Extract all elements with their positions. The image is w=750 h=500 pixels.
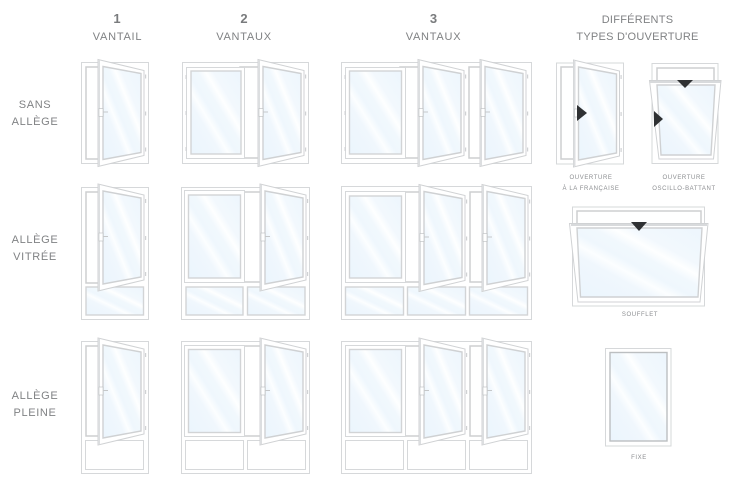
- heading: 2 vantaux: [216, 11, 272, 43]
- caption: oscillo-battant: OUVERTURE: [663, 175, 705, 181]
- caption: soufflet: SOUFFLET: [622, 312, 658, 318]
- row label: sans allège: ALLÈGE: [12, 115, 58, 128]
- type: fixe: [606, 348, 671, 461]
- icon: arrow right: [577, 105, 587, 121]
- heading: 2 vantaux: VANTAUX: [216, 31, 272, 43]
- type: ouverture oscillo-battant: [650, 64, 721, 192]
- window: 1 vantail sans allège: [82, 60, 148, 166]
- row label: allège vitrée: VITRÉE: [13, 250, 57, 263]
- type: soufflet: [570, 207, 708, 318]
- caption: oscillo-battant: OSCILLO-BATTANT: [652, 186, 716, 192]
- heading: 2 vantaux: 2: [240, 11, 248, 26]
- caption: française: [562, 175, 620, 192]
- window: 2 vantaux allège vitrée: [182, 184, 310, 320]
- heading: 1 vantail: 1: [113, 11, 121, 26]
- heading: 1 vantail: [93, 11, 142, 43]
- row label: sans allège: SANS: [19, 99, 51, 111]
- caption: fixe: FIXE: [631, 455, 647, 461]
- type: ouverture à la française: [556, 60, 624, 192]
- window: 3 vantaux allège pleine: [342, 338, 532, 474]
- heading: types d'ouverture: [576, 13, 699, 43]
- window: 2 vantaux allège pleine: [182, 338, 310, 474]
- caption: française: OUVERTURE: [570, 175, 612, 181]
- window: 2 vantaux sans allège: [182, 60, 308, 166]
- heading: types d'ouverture: DIFFÉRENTS: [602, 13, 673, 26]
- window: 3 vantaux sans allège: [342, 60, 532, 166]
- icon: arrow right: [654, 111, 663, 127]
- row label: allège vitrée: [12, 233, 58, 263]
- row label: allège pleine: [12, 389, 58, 419]
- window: 1 vantail allège pleine: [82, 338, 148, 474]
- icon: arrow down: [631, 222, 647, 231]
- row label: allège vitrée: ALLÈGE: [12, 233, 58, 246]
- heading: 3 vantaux: VANTAUX: [406, 31, 461, 43]
- caption: oscillo-battant: [652, 175, 716, 192]
- row label: allège pleine: PLEINE: [13, 407, 57, 419]
- caption: française: À LA FRANÇAISE: [562, 185, 620, 192]
- heading: 1 vantail: VANTAIL: [93, 31, 142, 43]
- icon: arrow down: [677, 80, 693, 88]
- row label: sans allège: [12, 99, 58, 128]
- heading: types d'ouverture: TYPES D'OUVERTURE: [576, 31, 699, 43]
- row label: allège pleine: ALLÈGE: [12, 389, 58, 402]
- window: 1 vantail allège vitrée: [82, 184, 148, 320]
- heading: 3 vantaux: 3: [430, 11, 437, 26]
- heading: 3 vantaux: [406, 11, 461, 43]
- window: 3 vantaux allège vitrée: [342, 184, 532, 320]
